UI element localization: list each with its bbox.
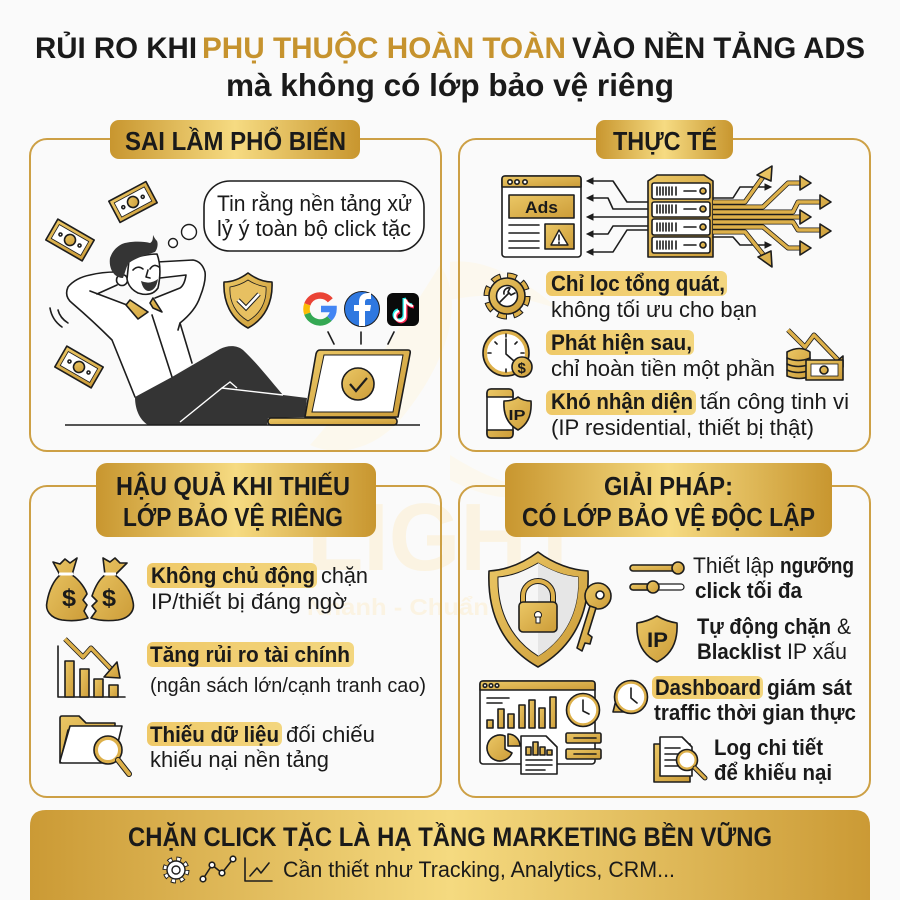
- icon: ip shield: [637, 616, 677, 662]
- footer heading: CHẶN CLICK TẶC LÀ HẠ TẦNG MARKETING BỀN VỮNG: [128, 821, 772, 852]
- icon: line chart: [245, 858, 272, 881]
- text: chỉ lọc tổng quát: không tối ưu cho bạn: [551, 297, 757, 322]
- icon: torn money bags: $: [62, 585, 77, 612]
- text: thiếu dữ liệu: khiếu nại nền tảng: [150, 747, 329, 772]
- arrows: server outward: [713, 166, 831, 267]
- floor line: [65, 424, 420, 426]
- heading: thực tế: [596, 120, 733, 159]
- text: tự động chặn: Blacklist: [697, 639, 782, 664]
- text: tự động chặn: [697, 614, 851, 664]
- heading: thực tế: THỰC TẾ: [613, 126, 717, 156]
- panel: hậu quả: [30, 463, 441, 797]
- icon: falling money: [787, 330, 843, 380]
- text: khó nhận diện: [546, 389, 849, 440]
- text: không chủ động: chặn: [321, 563, 368, 588]
- watermark logo: Nhanh - Chuẩn - Đúng: [307, 594, 577, 620]
- icon: clock in speech head: [613, 680, 648, 714]
- speech bubble: lỷ ý toàn bộ click tặc: [217, 216, 411, 241]
- heading: hậu quả khi thiếu lớp bảo vệ riêng: LỚP BẢO VỆ RIÊNG: [123, 502, 343, 532]
- footer banner: [30, 810, 870, 900]
- text: ngưỡng click: Thiết lập: [693, 553, 774, 578]
- text: dashboard: giám sát: [767, 675, 853, 700]
- watermark logo: LIGHT: [307, 484, 583, 591]
- heading: giải pháp có lớp bảo vệ độc lập: GIẢI PHÁP:: [604, 471, 733, 501]
- footer subtext: Cần thiết như Tracking, Analytics, CRM...: [283, 857, 675, 882]
- icon: clock and dollar: $: [518, 360, 526, 377]
- icon: clock and dollar: [483, 330, 532, 377]
- panel: thực tế: [459, 120, 870, 451]
- text: không chủ động: [147, 563, 368, 614]
- text: tăng rủi ro tài chính: (ngân sách lớn/cạnh tranh cao): [150, 675, 426, 697]
- text: chỉ lọc tổng quát: Chỉ lọc tổng quát,: [551, 271, 725, 296]
- heading: hậu quả khi thiếu lớp bảo vệ riêng: HẬU QUẢ KHI THIẾU: [116, 471, 350, 501]
- text: tăng rủi ro tài chính: Tăng rủi ro tài chính: [150, 642, 350, 667]
- text: phát hiện sau: [546, 330, 775, 381]
- text: khó nhận diện: (IP residential, thiết bị thật): [551, 415, 814, 440]
- watermark logo: [307, 261, 583, 620]
- icon: flying banknotes: [46, 182, 157, 388]
- panel: sai lầm phổ biến: [30, 120, 441, 451]
- text: tự động chặn: &: [837, 614, 851, 639]
- panel: giải pháp: [459, 463, 870, 797]
- icon: falling bar chart: [58, 639, 125, 697]
- title: VÀO NỀN TẢNG ADS: [572, 31, 865, 65]
- speech bubble: [168, 181, 424, 251]
- icon: ip shield: IP: [647, 629, 668, 652]
- text: khó nhận diện: tấn công tinh vi: [700, 389, 849, 414]
- text: log chi tiết: để khiếu nại: [714, 760, 832, 785]
- icon: gear with wrench: [487, 276, 527, 316]
- title: PHỤ THUỘC HOÀN TOÀN: [202, 31, 566, 65]
- icon: phone with ip shield: IP: [508, 408, 526, 424]
- icon: shield check: [224, 273, 272, 328]
- text: ngưỡng click: [693, 553, 854, 603]
- text: ngưỡng click: click tối đa: [695, 578, 803, 603]
- icon: folder with magnifier: [60, 716, 129, 774]
- icon: log document with magnifier: [654, 737, 705, 782]
- text: không chủ động: Không chủ động: [151, 563, 315, 588]
- text: log chi tiết: Log chi tiết: [714, 735, 824, 760]
- heading: sai lầm phổ biến: SAI LẦM PHỔ BIẾN: [125, 126, 346, 156]
- icon: security shield with lock and key: [489, 552, 611, 667]
- title: RỦI RO KHI: [35, 31, 197, 65]
- connector ticks: [328, 332, 394, 344]
- text: phát hiện sau: Phát hiện sau,: [551, 330, 692, 355]
- icon: sliders: [630, 562, 684, 593]
- icon: facebook logo: [344, 292, 380, 326]
- icon: network line: [200, 856, 236, 882]
- text: tự động chặn: IP xấu: [787, 639, 847, 664]
- text: thiếu dữ liệu: [147, 722, 375, 772]
- icon: ads window: Ads: [525, 198, 558, 217]
- icon: tiktok logo: [387, 293, 419, 326]
- icon: ads window: [502, 176, 581, 257]
- icon: dashboard: [480, 681, 601, 774]
- icon: google logo: [306, 296, 334, 322]
- text: thiếu dữ liệu: đối chiếu: [286, 722, 375, 747]
- heading: giải pháp có lớp bảo vệ độc lập: CÓ LỚP BẢO VỆ ĐỘC LẬP: [522, 502, 815, 532]
- speech bubble: Tin rằng nền tảng xử: [217, 191, 412, 216]
- text: khó nhận diện: Khó nhận diện: [551, 389, 693, 414]
- text: phát hiện sau: chỉ hoàn tiền một phần: [551, 356, 775, 381]
- text: tự động chặn: Tự động chặn: [697, 614, 831, 639]
- icon: server: [648, 175, 713, 257]
- heading: giải pháp có lớp bảo vệ độc lập: [505, 463, 832, 537]
- title: [35, 31, 865, 103]
- text: dashboard: traffic thời gian thực: [654, 700, 856, 725]
- arrows: server to ads: [587, 178, 648, 255]
- heading: hậu quả khi thiếu lớp bảo vệ riêng: [96, 463, 376, 537]
- icon: torn money bags: [47, 558, 133, 621]
- title: mà không có lớp bảo vệ riêng: [226, 67, 674, 103]
- text: log chi tiết: [714, 735, 832, 785]
- icon: torn money bags: $: [102, 585, 117, 612]
- text: không chủ động: IP/thiết bị đáng ngờ: [151, 589, 347, 614]
- illustration: relaxed man: [50, 235, 307, 425]
- text: tăng rủi ro tài chính: [147, 642, 426, 697]
- text: dashboard: [652, 675, 856, 725]
- text: thiếu dữ liệu: Thiếu dữ liệu: [150, 722, 279, 747]
- icon: phone with ip shield: [487, 389, 531, 438]
- icon: gear: [166, 860, 186, 880]
- text: chỉ lọc tổng quát: [546, 271, 757, 322]
- text: ngưỡng click: ngưỡng: [780, 553, 854, 578]
- icon: laptop: [268, 350, 410, 425]
- text: dashboard: Dashboard: [655, 675, 761, 700]
